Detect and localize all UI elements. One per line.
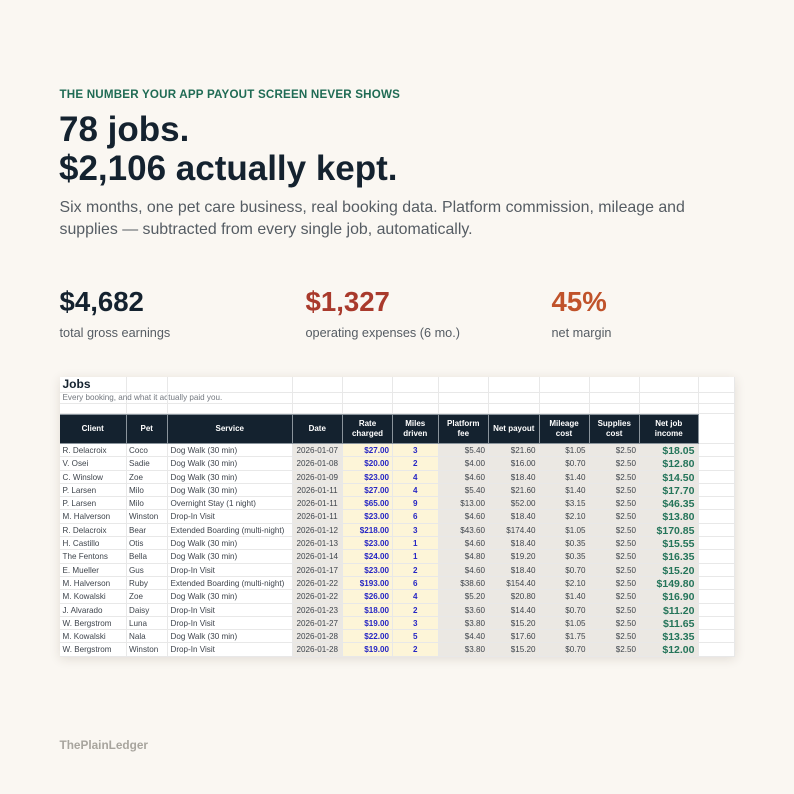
table rows: $12.80: [662, 458, 694, 470]
table rows: 6: [413, 579, 418, 588]
table rows: 2: [413, 459, 418, 468]
table rows: $0.70: [565, 459, 586, 468]
table rows: $149.80: [657, 578, 694, 590]
subtitle: supplies — subtracted from every single job, automatically.: [60, 221, 473, 238]
table rows: Winston: [129, 512, 158, 521]
table rows: $2.50: [616, 459, 636, 468]
table rows: 1: [413, 539, 418, 548]
table rows: $14.50: [662, 472, 694, 484]
table rows: Luna: [129, 619, 147, 628]
table rows: $2.50: [616, 566, 636, 575]
stat: gross earnings: [60, 286, 170, 340]
kicker: THE NUMBER YOUR APP PAYOUT SCREEN NEVER SHOWS: [60, 88, 400, 101]
table rows: $2.50: [616, 512, 636, 521]
table rows: $2.50: [616, 579, 636, 588]
table rows: $46.35: [662, 498, 694, 510]
table header: [60, 414, 735, 444]
table rows: The Fentons: [62, 552, 108, 561]
table rows: $4.80: [465, 552, 485, 561]
table rows: $18.00: [364, 606, 389, 615]
table rows: Zoe: [129, 473, 143, 482]
table rows: $12.00: [662, 644, 694, 656]
table rows: $27.00: [364, 486, 389, 495]
sheet subtitle row: [60, 392, 735, 404]
table rows: Bear: [129, 526, 146, 535]
table rows: 2026-01-22: [297, 579, 338, 588]
table rows: $17.70: [662, 485, 694, 497]
table rows: V. Osei: [62, 459, 88, 468]
table rows: $14.40: [511, 606, 536, 615]
table rows: $0.70: [565, 606, 586, 615]
table rows: Sadie: [129, 459, 150, 468]
table rows: Milo: [129, 486, 144, 495]
table rows: J. Alvarado: [62, 606, 103, 615]
table rows: M. Halverson: [62, 579, 110, 588]
table rows: Drop-In Visit: [170, 606, 215, 615]
table rows: $4.60: [465, 539, 485, 548]
table rows: $2.50: [616, 446, 636, 455]
table rows: $193.00: [360, 579, 389, 588]
table rows: 2026-01-11: [297, 486, 338, 495]
table header: Rate charged: [352, 418, 383, 438]
table rows: Milo: [129, 499, 144, 508]
table rows: $21.60: [511, 486, 536, 495]
table header: Client: [82, 424, 104, 433]
title: $2,106 actually kept.: [59, 149, 398, 188]
table rows: $23.00: [364, 512, 389, 521]
table rows: M. Halverson: [62, 512, 110, 521]
table rows: R. Delacroix: [62, 526, 107, 535]
table rows: $2.50: [616, 499, 636, 508]
table rows: 2026-01-08: [297, 459, 338, 468]
table rows: 2026-01-12: [297, 526, 338, 535]
table rows: 2026-01-11: [297, 512, 338, 521]
table rows: $2.10: [565, 579, 586, 588]
table rows: $4.00: [465, 459, 485, 468]
table rows: $2.50: [616, 606, 636, 615]
table rows: Dog Walk (30 min): [170, 446, 237, 455]
table header: Miles driven: [403, 418, 427, 438]
table rows: $43.60: [460, 526, 485, 535]
table rows: Drop-In Visit: [170, 512, 215, 521]
table rows: $1.05: [565, 619, 586, 628]
table rows: Dog Walk (30 min): [170, 486, 237, 495]
table rows: Drop-In Visit: [170, 645, 215, 654]
table rows: $15.55: [662, 538, 694, 550]
table rows: $4.60: [465, 566, 485, 575]
table rows: $3.80: [465, 619, 485, 628]
table rows: $13.80: [662, 511, 694, 523]
table rows: $19.00: [364, 619, 389, 628]
table rows: Otis: [129, 539, 143, 548]
table rows: $24.00: [364, 552, 389, 561]
table rows: 2026-01-13: [297, 539, 338, 548]
table rows: $0.70: [565, 566, 586, 575]
table rows: P. Larsen: [62, 486, 96, 495]
table rows: $3.80: [465, 645, 485, 654]
table rows: P. Larsen: [62, 499, 96, 508]
table rows: 3: [413, 619, 418, 628]
table rows: $23.00: [364, 473, 389, 482]
table rows: H. Castillo: [62, 539, 99, 548]
table rows: 1: [413, 552, 418, 561]
table rows: $13.00: [460, 499, 485, 508]
table rows: $2.50: [616, 486, 636, 495]
table rows: $23.00: [364, 539, 389, 548]
table rows: Dog Walk (30 min): [170, 552, 237, 561]
table header: Platform fee: [447, 418, 479, 438]
table rows: $15.20: [511, 645, 536, 654]
table rows: $2.10: [565, 512, 586, 521]
table rows: [60, 444, 735, 657]
table rows: 2: [413, 566, 418, 575]
table header: Net payout: [493, 424, 534, 433]
table rows: $1.05: [565, 526, 586, 535]
subtitle: Six months, one pet care business, real booking data. Platform commission, mileage and: [60, 199, 685, 216]
table rows: 2026-01-28: [297, 632, 338, 641]
table rows: $18.05: [662, 445, 694, 457]
sheet title row: Jobs: [62, 377, 91, 391]
table rows: $15.20: [662, 565, 694, 577]
table rows: $5.40: [465, 446, 485, 455]
table rows: 2026-01-23: [297, 606, 338, 615]
table rows: Winston: [129, 645, 158, 654]
table rows: Ruby: [129, 579, 148, 588]
table rows: Dog Walk (30 min): [170, 539, 237, 548]
table rows: $17.60: [511, 632, 536, 641]
table rows: 5: [413, 632, 418, 641]
table header: Net job income: [655, 418, 683, 438]
table rows: 2026-01-14: [297, 552, 338, 561]
table rows: $20.80: [511, 592, 536, 601]
table rows: 2026-01-17: [297, 566, 338, 575]
title: 78 jobs.: [59, 110, 189, 149]
spacer row: [60, 404, 735, 414]
table rows: 3: [413, 446, 418, 455]
table rows: 9: [413, 499, 418, 508]
expenses label: operating expenses (6 mo.): [306, 326, 460, 340]
table rows: Extended Boarding (multi-night): [170, 526, 284, 535]
table rows: E. Mueller: [62, 566, 99, 575]
margin value: 45%: [552, 286, 607, 317]
table rows: $3.60: [465, 606, 485, 615]
table rows: $27.00: [364, 446, 389, 455]
table rows: R. Delacroix: [62, 446, 107, 455]
table rows: $22.00: [364, 632, 389, 641]
gross value: $4,682: [60, 286, 144, 317]
table rows: $16.35: [662, 551, 694, 563]
expenses value: $1,327: [306, 286, 390, 317]
table rows: $21.60: [511, 446, 536, 455]
table rows: $2.50: [616, 632, 636, 641]
table rows: $5.20: [465, 592, 485, 601]
table rows: $1.40: [565, 473, 586, 482]
table rows: 2026-01-28: [297, 645, 338, 654]
table rows: $170.85: [657, 525, 694, 537]
gross label: total gross earnings: [60, 326, 170, 340]
table rows: 3: [413, 526, 418, 535]
table rows: 2026-01-27: [297, 619, 338, 628]
table rows: $52.00: [511, 499, 536, 508]
table rows: Coco: [129, 446, 148, 455]
table rows: $174.40: [506, 526, 536, 535]
table rows: $2.50: [616, 473, 636, 482]
table rows: $11.20: [663, 605, 694, 617]
table header: Service: [216, 424, 244, 433]
table rows: M. Kowalski: [62, 592, 106, 601]
table rows: Drop-In Visit: [170, 566, 215, 575]
table rows: $1.05: [565, 446, 586, 455]
table rows: Bella: [129, 552, 147, 561]
table rows: Dog Walk (30 min): [170, 459, 237, 468]
table rows: $2.50: [616, 539, 636, 548]
table rows: 2026-01-22: [297, 592, 338, 601]
table header: Mileage cost: [549, 418, 579, 438]
table rows: $20.00: [364, 459, 389, 468]
table rows: Dog Walk (30 min): [170, 473, 237, 482]
table rows: $65.00: [364, 499, 389, 508]
table rows: $18.40: [511, 512, 536, 521]
table rows: $3.15: [565, 499, 586, 508]
brand footer: ThePlainLedger: [60, 738, 148, 752]
table rows: Dog Walk (30 min): [170, 592, 237, 601]
table rows: Overnight Stay (1 night): [170, 499, 256, 508]
table rows: Nala: [129, 632, 146, 641]
table rows: $2.50: [616, 526, 636, 535]
table rows: $1.75: [565, 632, 586, 641]
table rows: $19.20: [511, 552, 536, 561]
table rows: $38.60: [460, 579, 485, 588]
table rows: $0.70: [565, 645, 586, 654]
table rows: $13.35: [662, 631, 694, 643]
subtitle: [60, 199, 685, 238]
table rows: 6: [413, 512, 418, 521]
table rows: $4.60: [465, 512, 485, 521]
table rows: $0.35: [565, 539, 586, 548]
table rows: $5.40: [465, 486, 485, 495]
table rows: Gus: [129, 566, 144, 575]
table rows: $1.40: [565, 486, 586, 495]
table rows: $2.50: [616, 592, 636, 601]
margin label: net margin: [552, 326, 611, 340]
table rows: 2026-01-07: [297, 446, 338, 455]
table header: Supplies cost: [598, 418, 631, 438]
table rows: $154.40: [506, 579, 536, 588]
spreadsheet: jobs table: [60, 377, 734, 657]
table rows: $18.40: [511, 473, 536, 482]
table header: Date: [309, 424, 326, 433]
table rows: $218.00: [360, 526, 389, 535]
table rows: 4: [413, 473, 418, 482]
table rows: $0.35: [565, 552, 586, 561]
table rows: $2.50: [616, 552, 636, 561]
title: [59, 110, 398, 188]
table rows: $18.40: [511, 539, 536, 548]
sheet subtitle row: Every booking, and what it actually paid you.: [62, 392, 222, 402]
table rows: $4.40: [465, 632, 485, 641]
table rows: 2026-01-09: [297, 473, 338, 482]
table rows: $2.50: [616, 619, 636, 628]
stat: operating expenses: [306, 286, 460, 340]
table rows: Extended Boarding (multi-night): [170, 579, 284, 588]
table rows: $26.00: [364, 592, 389, 601]
table rows: $11.65: [663, 618, 694, 630]
table header: Pet: [141, 424, 153, 433]
table rows: $23.00: [364, 566, 389, 575]
table rows: $15.20: [511, 619, 536, 628]
table rows: C. Winslow: [62, 473, 103, 482]
table rows: $19.00: [364, 645, 389, 654]
table rows: M. Kowalski: [62, 632, 106, 641]
table rows: $4.60: [465, 473, 485, 482]
table rows: 2: [413, 606, 418, 615]
table rows: 4: [413, 486, 418, 495]
table rows: W. Bergstrom: [62, 645, 112, 654]
stat: net margin: [552, 286, 611, 340]
table rows: Dog Walk (30 min): [170, 632, 237, 641]
table rows: 2026-01-11: [297, 499, 338, 508]
table rows: $2.50: [616, 645, 636, 654]
table rows: 4: [413, 592, 418, 601]
table rows: Zoe: [129, 592, 143, 601]
table rows: 2: [413, 645, 418, 654]
sheet title row: [60, 377, 735, 393]
table rows: Drop-In Visit: [170, 619, 215, 628]
table rows: $16.00: [511, 459, 536, 468]
table rows: $18.40: [511, 566, 536, 575]
table rows: Daisy: [129, 606, 149, 615]
table rows: $16.90: [662, 591, 694, 603]
table rows: $1.40: [565, 592, 586, 601]
table rows: W. Bergstrom: [62, 619, 112, 628]
